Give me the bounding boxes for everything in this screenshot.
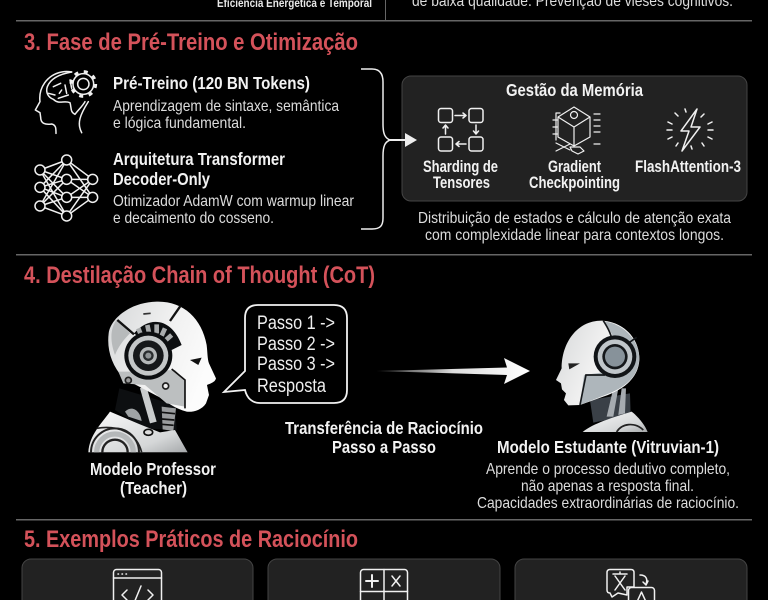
text block: Pré-Treino: Aprendizagem de sintaxe, semântica — [113, 98, 339, 115]
panel: Gestão da Memória — [402, 76, 747, 201]
text block: Arquitetura Transformer: Arquitetura Transformer — [113, 149, 285, 169]
icon: code window — [114, 570, 162, 600]
text block: memory description — [418, 210, 731, 244]
label: Modelo Professor: (Teacher) — [120, 478, 187, 498]
text block: Modelo Estudante — [477, 437, 739, 512]
label: Gradient Checkpointing: Gradient — [548, 158, 601, 176]
speech bubble: reasoning steps: Passo 1 -> — [257, 313, 335, 334]
icon: brain and gear head — [35, 71, 96, 133]
text block: Modelo Estudante: Modelo Estudante (Vitruvian-1) — [497, 437, 719, 457]
text block: Modelo Estudante: não apenas a resposta final. — [521, 478, 694, 495]
speech bubble: reasoning steps: Passo 3 -> — [257, 354, 335, 375]
bracket — [361, 69, 390, 229]
label: Transferência de Raciocínio — [285, 418, 483, 457]
icon: neural network — [35, 155, 98, 221]
arrow: knowledge transfer — [376, 358, 530, 384]
speech bubble: reasoning steps: Resposta — [257, 376, 326, 397]
card: code example — [22, 559, 253, 600]
text block: memory description: com complexidade linear para contextos longos. — [425, 227, 724, 244]
icon: translation bubbles — [607, 570, 654, 600]
text block: Pré-Treino — [113, 73, 339, 132]
text block: Modelo Estudante: Aprende o processo dedutivo completo, — [486, 461, 730, 478]
label: Sharding de Tensores — [423, 158, 498, 192]
text block: Arquitetura Transformer — [113, 149, 355, 227]
card: translation example — [515, 559, 747, 600]
label: Gradient Checkpointing: Checkpointing — [529, 174, 620, 192]
label: Sharding de Tensores: Sharding de — [423, 158, 498, 176]
illustration: teacher robot head — [88, 302, 216, 452]
label: Transferência de Raciocínio: Passo a Passo — [332, 437, 436, 457]
label: Modelo Professor: Modelo Professor — [90, 459, 216, 479]
panel heading: Gestão da Memória — [506, 80, 643, 100]
icon: lightning bolt — [667, 109, 713, 151]
label: Sharding de Tensores: Tensores — [433, 174, 490, 192]
label: Modelo Professor — [90, 459, 216, 498]
card: math example — [268, 559, 500, 600]
top fragment: previous section text — [16, 0, 752, 22]
text block: Pré-Treino: Pré-Treino (120 BN Tokens) — [113, 73, 310, 93]
arrow into memory panel — [388, 133, 417, 147]
text block: Arquitetura Transformer: Otimizador AdamW com warmup linear — [113, 193, 355, 210]
heading: section 5: 5. Exemplos Práticos de Raciocínio — [24, 526, 358, 553]
icon: gradient checkpointing cube — [553, 107, 600, 154]
icon: sharding — [438, 108, 483, 151]
icon: calculator grid — [360, 570, 408, 600]
label: FlashAttention-3: FlashAttention-3 — [635, 158, 741, 176]
text block: Arquitetura Transformer: Decoder-Only — [113, 169, 210, 189]
text block: Pré-Treino: e lógica fundamental. — [113, 115, 246, 132]
illustration: student robot head — [556, 321, 648, 432]
text block: Arquitetura Transformer: e decaimento do cosseno. — [113, 210, 274, 227]
label: Transferência de Raciocínio: Transferência de Raciocínio — [285, 418, 483, 438]
speech bubble: reasoning steps — [224, 305, 347, 403]
heading: section 3: 3. Fase de Pré-Treino e Otimização — [24, 29, 358, 56]
speech bubble: reasoning steps: Passo 2 -> — [257, 334, 335, 355]
heading: section 4: 4. Destilação Chain of Thought (CoT) — [24, 262, 375, 289]
label: Gradient Checkpointing — [529, 158, 620, 192]
